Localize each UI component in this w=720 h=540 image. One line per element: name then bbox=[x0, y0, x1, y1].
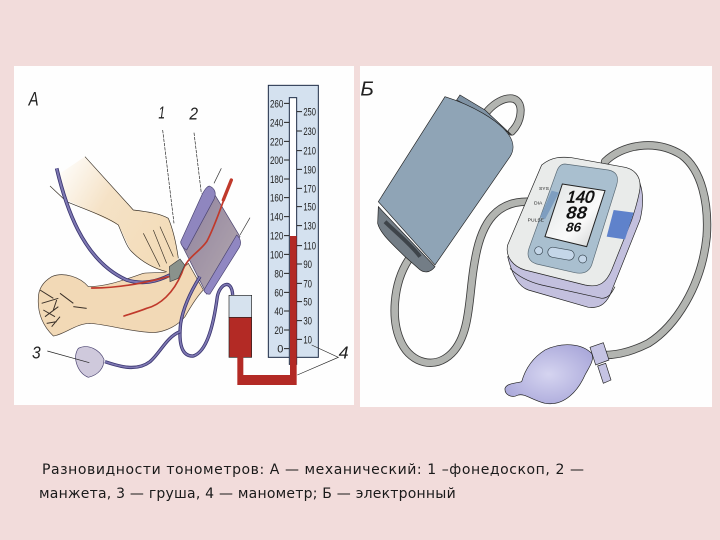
screen readings: 86 bbox=[564, 220, 583, 235]
label: Б: Б bbox=[360, 77, 374, 100]
examiner's hand bbox=[50, 157, 178, 273]
manometer scale: 70 bbox=[303, 278, 312, 290]
arteries bbox=[92, 180, 231, 316]
panel: mechanical tonometer A bbox=[28, 85, 349, 385]
monitor body bbox=[507, 157, 642, 308]
display panel bbox=[528, 164, 618, 273]
screen readings: 88 bbox=[564, 203, 590, 222]
labels and leader lines: 2 bbox=[188, 103, 198, 123]
manometer scale: 230 bbox=[303, 126, 316, 138]
manometer scale: 170 bbox=[303, 183, 316, 195]
rubber tubing bbox=[105, 277, 233, 367]
manometer scale: 260 bbox=[270, 98, 283, 110]
manometer scale: 10 bbox=[303, 334, 312, 346]
manometer scale: 200 bbox=[270, 155, 283, 167]
manometer scale: 130 bbox=[303, 221, 316, 233]
side blue button bbox=[607, 210, 634, 239]
buttons bbox=[535, 246, 587, 263]
caption text bbox=[39, 462, 585, 502]
manometer scale: 210 bbox=[303, 146, 316, 158]
manometer scale: 140 bbox=[270, 212, 283, 224]
panel: white background A bbox=[14, 66, 354, 405]
tubing bbox=[395, 98, 707, 363]
manometer scale: 40 bbox=[274, 306, 283, 318]
manometer scale: 150 bbox=[303, 202, 316, 214]
stethoscope tube bbox=[57, 168, 170, 282]
icon: cuff bbox=[378, 95, 513, 272]
manometer scale: 220 bbox=[270, 136, 283, 148]
manometer scale bbox=[268, 85, 318, 364]
manometer scale: 240 bbox=[270, 117, 283, 129]
caption line 1: Разновидности тонометров: А — механический: 1 –фонедоскоп, 2 — bbox=[42, 462, 585, 478]
icon: chest piece bbox=[169, 259, 185, 282]
manometer scale: 180 bbox=[270, 174, 283, 186]
forearm and fist bbox=[38, 263, 203, 336]
manometer scale: 120 bbox=[270, 231, 283, 243]
display side labels: DIA bbox=[534, 201, 543, 207]
screen readings bbox=[564, 188, 597, 235]
manometer scale: 20 bbox=[274, 325, 283, 337]
icon: cuff bbox=[181, 168, 250, 294]
labels and leader lines bbox=[32, 103, 349, 375]
labels and leader lines: 1 bbox=[158, 103, 165, 123]
label: A: А bbox=[28, 89, 39, 110]
labels and leader lines: 3 bbox=[32, 343, 41, 363]
manometer scale: 0 bbox=[277, 344, 283, 356]
manometer scale: 190 bbox=[303, 164, 316, 176]
manometer scale: 90 bbox=[303, 259, 312, 271]
labels and leader lines: 4 bbox=[339, 343, 349, 363]
caption line 2: манжета, 3 — груша, 4 — манометр; Б — электронный bbox=[39, 486, 456, 502]
manometer scale: 80 bbox=[274, 268, 283, 280]
display side labels: PULSE bbox=[528, 217, 545, 223]
panel: white background B bbox=[360, 66, 712, 407]
manometer scale: 110 bbox=[303, 241, 316, 253]
manometer scale: 100 bbox=[270, 249, 283, 261]
manometer scale: 160 bbox=[270, 193, 283, 205]
icon: bulb with valve bbox=[505, 343, 611, 404]
screen readings: 140 bbox=[565, 188, 597, 207]
display side labels: SYS bbox=[539, 186, 550, 192]
panel: electronic tonometer B bbox=[360, 77, 707, 404]
manometer scale: 60 bbox=[274, 287, 283, 299]
manometer scale: 250 bbox=[303, 107, 316, 119]
manometer scale: 50 bbox=[303, 297, 312, 309]
display side labels bbox=[528, 186, 550, 223]
icon: bulb bbox=[76, 347, 104, 377]
manometer scale: 30 bbox=[303, 316, 312, 328]
mercury column and reservoir bbox=[229, 236, 297, 385]
